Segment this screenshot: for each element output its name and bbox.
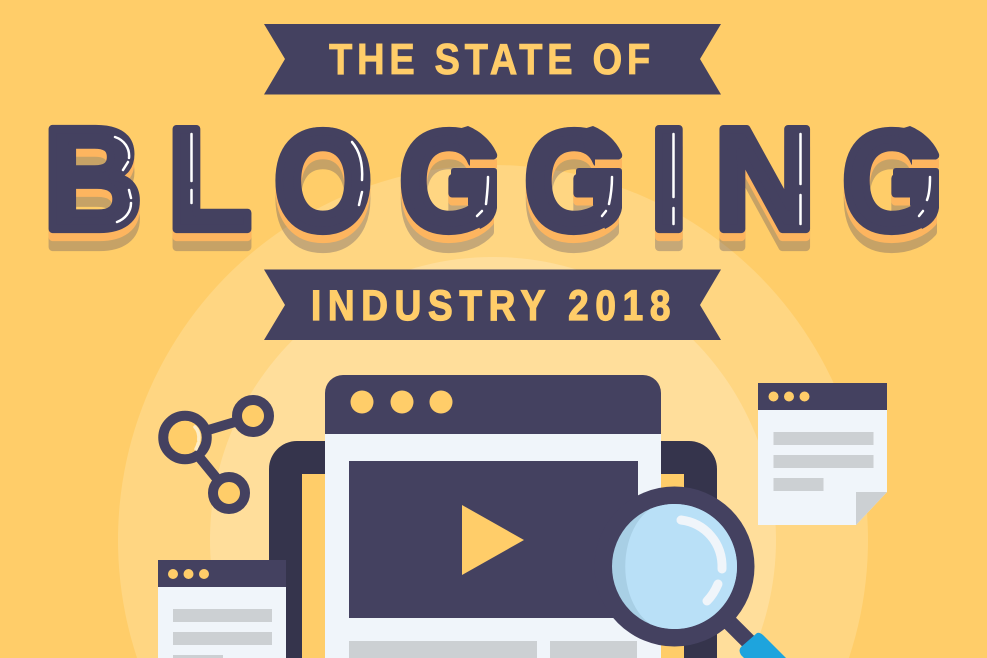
play icon [462,505,524,575]
title face layer: L [167,99,252,261]
text lines [349,641,637,658]
title face layer: G [524,103,623,260]
title face layer: G [842,103,941,260]
sticky note: top right [758,383,887,525]
note lines [774,432,874,491]
icon: magnifying glass [594,486,786,658]
small browser card: bottom left [158,560,286,658]
title orange extrusion layer: G [524,111,623,268]
magnifier handle [725,618,750,643]
title orange extrusion layer [43,105,941,269]
card dots [168,569,209,579]
title face layer: I [650,99,688,261]
background circle: outer [118,165,868,658]
magnifier ring [594,486,754,646]
title orange extrusion layer: G [399,111,498,268]
title shadow layer: B [43,115,142,278]
main browser window [325,375,661,658]
magnifier lens [612,504,737,629]
title shadow layer: I [650,117,688,279]
title face layer: O [274,103,372,260]
window dots [350,390,452,414]
title orange extrusion layer: O [274,111,372,268]
banner: the state of [264,24,721,94]
title orange extrusion layer: N [714,107,816,268]
title orange extrusion layer: G [842,111,941,268]
title face layer: B [43,97,142,260]
title shadow layer: G [399,121,498,278]
banner: industry 2018 [264,270,721,340]
card lines [173,609,272,658]
title orange extrusion layer: L [167,107,252,269]
title highlights [115,134,930,224]
title shadow layer: L [167,117,252,279]
title: BLOGGING [43,97,941,279]
banner: the state of: THE STATE OF [329,35,650,84]
title shadow layer: O [274,121,372,278]
note dots [768,392,810,402]
title orange extrusion layer: B [43,105,142,268]
icon: tablet device [269,441,717,658]
icon: share network [163,400,269,509]
letter G terminal and bar refinements [451,126,939,229]
title face layer: N [714,99,816,260]
title shadow layer: G [524,121,623,278]
background circle: inner [210,257,776,658]
title face layer: G [399,103,498,260]
title shadow layer: G [842,121,941,278]
note fold [856,492,887,525]
title shadow layer: N [714,117,816,278]
title shadow layer [43,115,941,279]
title orange extrusion layer: I [650,107,688,269]
banner: industry 2018: INDUSTRY 2018 [311,282,670,330]
video player [349,461,638,618]
title face layer [43,97,941,261]
lens highlights [681,520,722,601]
